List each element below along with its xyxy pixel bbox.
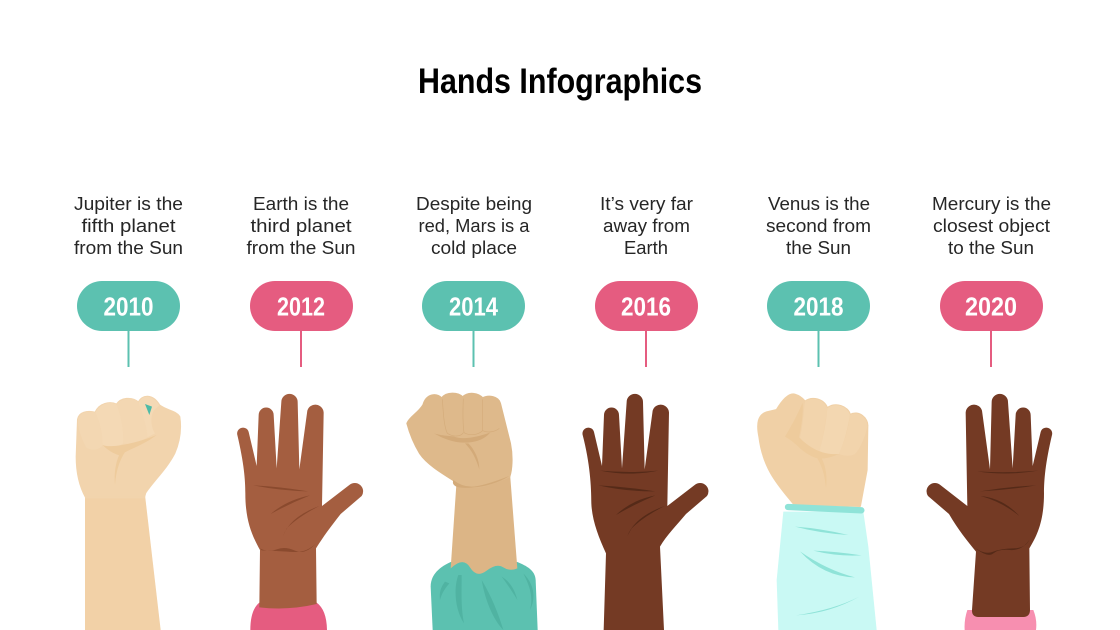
column 2020 text bbox=[932, 194, 1051, 258]
hand 6: dark open palm with pink sleeve bbox=[927, 394, 1052, 630]
column 2020 text: to the Sun bbox=[948, 238, 1034, 258]
column 2016 text: Earth bbox=[624, 238, 668, 258]
hand 3: tan raised fist with teal sleeve bbox=[407, 394, 538, 630]
column 2018 text: Venus is the bbox=[768, 194, 870, 214]
column 2012 text: Earth is the bbox=[253, 194, 349, 214]
column 2018 text: the Sun bbox=[786, 238, 851, 258]
title: Hands Infographics bbox=[418, 62, 702, 101]
column 2014 text: cold place bbox=[431, 238, 517, 258]
hand 4: dark open palm bbox=[582, 394, 708, 630]
column 2014 text: Despite being bbox=[416, 194, 532, 214]
column 2012 text bbox=[246, 194, 356, 258]
column 2012 text: third planet bbox=[250, 216, 352, 236]
year marker 2012: 2012 bbox=[277, 292, 325, 322]
year marker 2014: 2014 bbox=[449, 292, 498, 322]
column 2018 text bbox=[766, 194, 871, 258]
year marker 2010: 2010 bbox=[104, 292, 154, 322]
hand 1: light raised fist bbox=[77, 397, 180, 630]
hand 2: brown open palm with pink sleeve bbox=[237, 394, 363, 630]
column 2020 text: Mercury is the bbox=[932, 194, 1051, 214]
column 2010 text: fifth planet bbox=[82, 216, 176, 236]
column 2012 text: from the Sun bbox=[246, 238, 356, 258]
year marker 2012 bbox=[250, 281, 353, 367]
column 2020 text: closest object bbox=[933, 216, 1050, 236]
column 2010 text: from the Sun bbox=[74, 238, 183, 258]
column 2016 text: It’s very far bbox=[600, 194, 693, 214]
hand 5: light raised fist with pale blue sleeve bbox=[758, 394, 877, 630]
column 2010 text: Jupiter is the bbox=[74, 194, 183, 214]
year marker 2020 bbox=[940, 281, 1043, 367]
year marker 2014 bbox=[422, 281, 525, 367]
year marker 2018 bbox=[767, 281, 870, 367]
year marker 2010 bbox=[77, 281, 180, 367]
column 2016 text bbox=[600, 194, 693, 258]
column 2014 text: red, Mars is a bbox=[418, 216, 531, 236]
column 2010 text bbox=[74, 194, 183, 258]
year marker 2016: 2016 bbox=[621, 292, 671, 322]
year marker 2020: 2020 bbox=[965, 292, 1017, 322]
column 2018 text: second from bbox=[766, 216, 871, 236]
column 2014 text bbox=[416, 194, 532, 258]
year marker 2016 bbox=[595, 281, 698, 367]
column 2016 text: away from bbox=[603, 216, 690, 236]
year marker 2018: 2018 bbox=[794, 292, 844, 322]
